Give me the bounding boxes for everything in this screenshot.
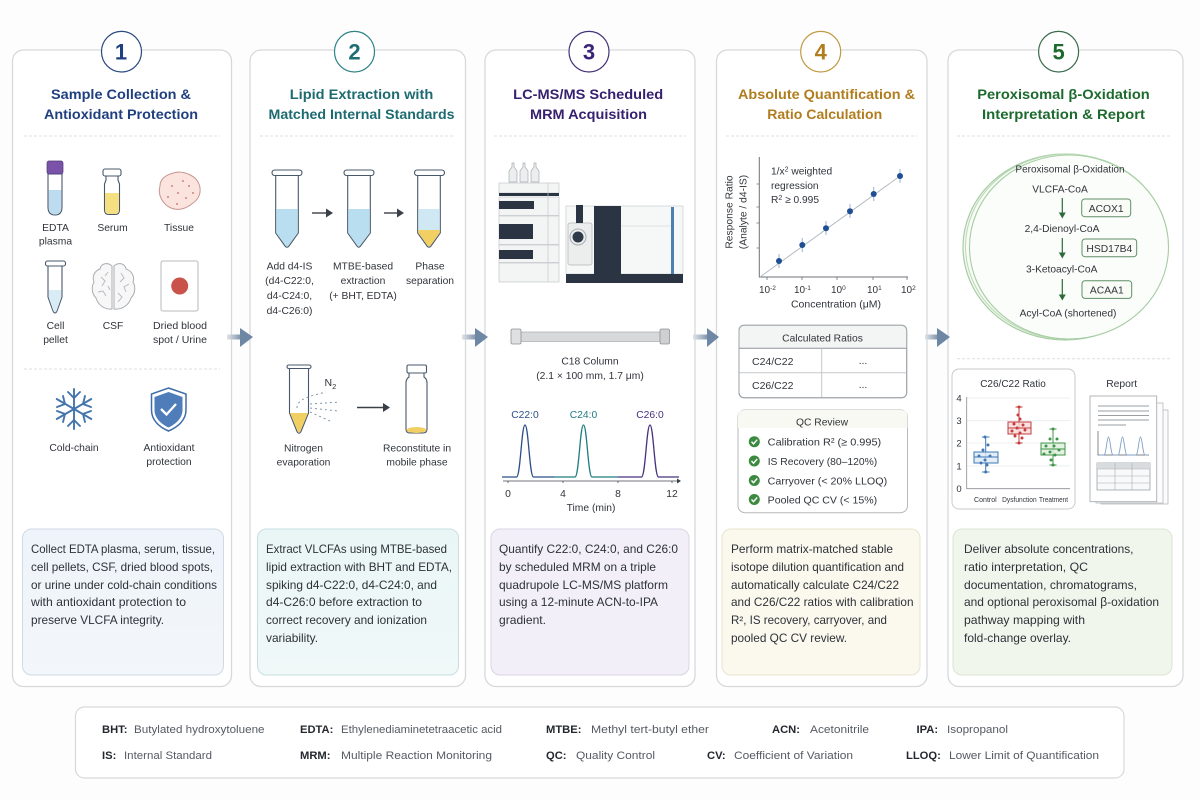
- chart: C26/C22 ratio box plot: [952, 369, 1075, 509]
- label: MTBE extraction: (+ BHT, EDTA): [329, 291, 397, 302]
- arrow: step 3 to 4: [693, 328, 719, 347]
- box: control: [974, 436, 998, 474]
- table: calculated ratios: ...: [859, 380, 867, 391]
- step number 3: [569, 31, 609, 72]
- text box: step 3 description: [491, 529, 689, 675]
- legend: abbreviations: MTBE:: [546, 724, 581, 736]
- label: EDTA plasma: plasma: [39, 236, 72, 248]
- label: report: Report: [1106, 379, 1137, 390]
- step number 5: [1039, 31, 1079, 72]
- table: calculated ratios: [739, 325, 907, 398]
- heading: LC-MS/MS: [513, 87, 663, 123]
- text box: step 5 description: ratio interpretation, QC: [964, 561, 1088, 574]
- table: calculated ratios: Calculated Ratios: [782, 334, 863, 344]
- label: add d4-IS: (d4-C22:0,: [265, 276, 314, 287]
- diagram: peroxisomal beta-oxidation pathway: 3-Ketoacyl-CoA: [1026, 265, 1098, 276]
- chart: calibration curve: Response Ratio: [724, 175, 736, 249]
- chart: chromatogram: 0: [505, 489, 511, 500]
- arrow: [357, 403, 390, 412]
- legend: abbreviations: [76, 707, 1124, 778]
- icon: dried blood spot card: [161, 261, 198, 311]
- icon: serum vial: [103, 169, 121, 214]
- chart: calibration curve: R: [771, 195, 778, 206]
- label: EDTA plasma: EDTA: [42, 223, 69, 234]
- enzyme: ACAA1: [1082, 281, 1132, 298]
- panel: QC review: [738, 410, 908, 513]
- chart: C26/C22 ratio box plot: 4: [956, 394, 962, 404]
- panel: step 3 LC-MS/MS: [485, 31, 695, 686]
- legend: abbreviations: Butylated hydroxytoluene: [134, 724, 264, 736]
- text box: step 1 description: cell pellets, CSF, dried blood spots,: [31, 561, 213, 574]
- heading: interpretation: Interpretation & Report: [982, 107, 1145, 123]
- diagram: peroxisomal beta-oxidation pathway: VLCFA-CoA: [1032, 184, 1088, 196]
- table: calculated ratios: C26/C22: [752, 380, 794, 392]
- heading: quantification: Ratio Calculation: [767, 107, 882, 123]
- heading: quantification: Absolute Quantification &: [738, 87, 915, 103]
- text box: step 3 description: quadrupole LC-MS/MS platform: [499, 579, 668, 592]
- icon: report document stack: [1090, 396, 1168, 504]
- chart: C26/C22 ratio box plot: Control: [974, 495, 997, 504]
- text box: step 2 description: correct recovery and ionization: [266, 614, 427, 627]
- chart: C26/C22 ratio box plot: Dysfunction: [1002, 495, 1037, 504]
- text box: step 5 description: documentation, chromatograms,: [964, 579, 1137, 592]
- chart: chromatogram: 4: [560, 489, 566, 500]
- step number 4: 4: [815, 40, 828, 64]
- label: N2: N: [324, 377, 332, 389]
- heading: interpretation: Peroxisomal β-Oxidation: [977, 87, 1150, 103]
- legend: abbreviations: IPA:: [916, 724, 938, 736]
- panel: step 2 lipid extraction: [250, 31, 466, 686]
- text box: step 2 description: variability.: [266, 632, 318, 645]
- heading: quantification: [738, 87, 915, 123]
- chart: chromatogram: C24:0: [570, 410, 598, 421]
- chart: chromatogram: [502, 410, 681, 514]
- heading: sample collection: Antioxidant Protection: [44, 107, 198, 123]
- label: MTBE extraction: MTBE-based: [333, 262, 393, 272]
- text box: step 3 description: using a 12-minute ACN-to-IPA: [499, 596, 658, 609]
- text box: step 3 description: by scheduled MRM on a triple: [499, 561, 656, 574]
- text box: step 5 description: fold-change overlay.: [964, 632, 1071, 645]
- chart: chromatogram: Time (min): [567, 503, 615, 514]
- legend: abbreviations: MRM:: [300, 750, 330, 762]
- chart: C26/C22 ratio box plot: C26/C22 Ratio: [980, 379, 1046, 390]
- chart: calibration curve: 10: [867, 285, 878, 296]
- box: dysfunction: [1008, 406, 1031, 444]
- text box: step 1 description: [22, 529, 224, 675]
- chart: chromatogram: 8: [615, 489, 621, 500]
- icon: C18 column: [511, 329, 670, 344]
- text box: step 1 description: with antioxidant protection to: [30, 596, 186, 609]
- label: nitrogen evaporation: [277, 444, 331, 468]
- chart: calibration curve: (Analyte / d4-IS): [738, 175, 750, 249]
- label: phase separation: [406, 262, 454, 287]
- label: C18 column: (2.1 × 100 mm, 1.7 μm): [536, 371, 644, 382]
- check: carryover: Carryover (< 20% LLOQ): [768, 476, 887, 488]
- text box: step 2 description: Extract VLCFAs using MTBE-based: [266, 543, 447, 556]
- chart: C26/C22 ratio box plot: 1: [956, 462, 962, 472]
- label: reconstitute in mobile phase: mobile phase: [386, 458, 448, 468]
- diagram: peroxisomal beta-oxidation pathway: Acyl-CoA (shortened): [1020, 309, 1116, 320]
- legend: abbreviations: Lower Limit of Quantification: [949, 750, 1099, 762]
- panel: step 1 sample collection: [12, 31, 232, 686]
- chart: C26/C22 ratio box plot: 2: [956, 438, 962, 450]
- step number 5: 5: [1052, 40, 1065, 64]
- heading: interpretation: [977, 87, 1150, 123]
- legend: abbreviations: LLOQ:: [906, 750, 941, 762]
- diagram: peroxisomal beta-oxidation pathway: Peroxisomal β-Oxidation: [1015, 164, 1125, 176]
- chart: C26/C22 ratio box plot: 0: [956, 484, 962, 495]
- enzyme: HSD17B4: HSD17B4: [1086, 244, 1132, 255]
- label: antioxidant protection: Antioxidant: [144, 443, 195, 454]
- chart: calibration curve: 1/x: [771, 166, 785, 178]
- label: dried blood spot / urine: spot / Urine: [153, 335, 207, 346]
- text box: step 1 description: or urine under cold-chain conditions: [31, 579, 217, 592]
- chart: calibration curve: 2: [778, 195, 782, 202]
- box: treatment: [1041, 428, 1065, 466]
- legend: abbreviations: Acetonitrile: [810, 724, 869, 736]
- label: antioxidant protection: protection: [146, 457, 192, 468]
- text box: step 1 description: Collect EDTA plasma, serum, tissue,: [31, 543, 215, 556]
- legend: abbreviations: CV:: [707, 750, 726, 762]
- legend: abbreviations: ACN:: [772, 724, 800, 736]
- text box: step 1 description: preserve VLCFA integrity.: [31, 614, 164, 627]
- icon: antioxidant shield: [152, 388, 186, 431]
- enzyme: ACOX1: [1082, 199, 1131, 217]
- chart: calibration curve: -1: [805, 285, 811, 292]
- label: add d4-IS: d4-C24:0,: [267, 291, 312, 302]
- arrow: [312, 208, 333, 218]
- label: cell pellet: [43, 321, 68, 346]
- label: add d4-IS: Add d4-IS: [267, 262, 313, 272]
- panel: step 4 quantification: [716, 31, 927, 686]
- icon: snowflake: [57, 389, 91, 429]
- icon: nitrogen evaporation: [287, 365, 340, 433]
- text box: step 5 description: pathway mapping with: [964, 614, 1085, 627]
- enzyme: ACOX1: ACOX1: [1089, 204, 1124, 215]
- legend: abbreviations: Coefficient of Variation: [734, 750, 853, 762]
- label: add d4-IS: d4-C26:0): [267, 306, 312, 317]
- chart: C26/C22 ratio box plot: 3: [956, 416, 962, 427]
- icon: LC stack with solvent bottles: [499, 163, 559, 282]
- label: phase separation: Phase: [415, 262, 445, 272]
- legend: abbreviations: Isopropanol: [947, 724, 1008, 736]
- chart: C26/C22 ratio box plot: Treatment: [1039, 495, 1069, 504]
- diagram: peroxisomal beta-oxidation pathway: [963, 154, 1168, 340]
- icon: EDTA plasma tube: [47, 161, 63, 215]
- chart: calibration curve: weighted: [788, 166, 832, 178]
- icon: tissue: [159, 172, 200, 209]
- chart: calibration curve: 1: [878, 285, 882, 292]
- label: dried blood spot / urine: [153, 321, 207, 346]
- label: reconstitute in mobile phase: [383, 444, 451, 468]
- diagram: peroxisomal beta-oxidation pathway: 2,4-Dienoyl-CoA: [1025, 224, 1100, 235]
- legend: abbreviations: Multiple Reaction Monitoring: [341, 750, 492, 762]
- label: EDTA plasma: [39, 223, 72, 248]
- chart: calibration curve: 10: [759, 285, 770, 296]
- table: calculated ratios: ...: [859, 356, 867, 367]
- label: serum: Serum: [97, 223, 128, 234]
- label: cell pellet: Cell: [47, 321, 64, 332]
- label: antioxidant protection: [144, 443, 195, 468]
- chart: calibration curve: 10: [794, 285, 805, 296]
- legend: abbreviations: EDTA:: [300, 724, 333, 736]
- chart: calibration curve: [724, 157, 916, 310]
- check: calibration: Calibration R² (≥ 0.995): [768, 436, 881, 448]
- icon: tube phase separation: [414, 170, 444, 247]
- arrow: [384, 208, 404, 218]
- icon: tube add d4-IS: [272, 170, 302, 247]
- chart: chromatogram: C26:0: [636, 410, 664, 421]
- arrow: step 1 to 2: [227, 328, 253, 347]
- heading: LC-MS/MS: LC-MS/MS Scheduled: [513, 87, 663, 103]
- text box: step 4 description: [722, 529, 920, 675]
- text box: step 2 description: d4-C26:0 before extraction to: [266, 596, 422, 609]
- text box: step 4 description: R², IS recovery, carryover, and: [731, 614, 887, 627]
- icon: cell pellet tube: [46, 261, 66, 313]
- text box: step 2 description: [258, 529, 458, 675]
- text box: step 4 description: and C26/C22 ratios with calibration: [731, 596, 914, 609]
- text box: step 2 description: spiking d4-C22:0, d4-C24:0, and: [266, 579, 437, 592]
- legend: abbreviations: IS:: [102, 750, 116, 762]
- text box: step 4 description: pooled QC CV review.: [731, 632, 847, 645]
- label: reconstitute in mobile phase: Reconstitute in: [383, 444, 451, 454]
- icon: mass spectrometer: [566, 205, 683, 283]
- text box: step 2 description: lipid extraction with BHT and EDTA,: [266, 561, 452, 574]
- text box: step 5 description: [953, 529, 1172, 675]
- label: add d4-IS: [265, 262, 314, 317]
- arrow: step 4 to 5: [925, 328, 950, 347]
- text box: step 5 description: Deliver absolute concentrations,: [964, 543, 1134, 556]
- chart: chromatogram: C22:0: [511, 410, 539, 421]
- chart: calibration curve: 2: [912, 285, 916, 292]
- table: calculated ratios: C24/C22: [752, 356, 794, 368]
- label: tissue: Tissue: [164, 223, 194, 234]
- arrow: step 2 to 3: [462, 328, 488, 347]
- step number 4: [801, 31, 841, 72]
- label: nitrogen evaporation: evaporation: [277, 458, 331, 468]
- label: dried blood spot / urine: Dried blood: [153, 321, 207, 332]
- text box: step 4 description: Perform matrix-matched stable: [731, 543, 893, 556]
- icon: reconstitute vial: [406, 365, 427, 433]
- enzyme: ACAA1: ACAA1: [1090, 286, 1124, 296]
- step number 2: 2: [348, 40, 361, 64]
- label: cold-chain: Cold-chain: [49, 443, 99, 454]
- icon: brain CSF: [92, 264, 135, 309]
- panel: step 5 interpretation: [948, 31, 1183, 686]
- heading: LC-MS/MS: MRM Acquisition: [530, 107, 647, 123]
- chart: calibration curve: 10: [901, 285, 912, 296]
- chart: calibration curve: 10: [831, 285, 842, 296]
- chart: calibration curve: 2: [785, 166, 789, 174]
- label: C18 column: [536, 356, 644, 382]
- heading: sample collection: [44, 87, 198, 123]
- chart: calibration curve: regression: [771, 181, 819, 192]
- label: phase separation: separation: [406, 276, 454, 287]
- chart: calibration curve: Concentration (μM): [791, 298, 881, 310]
- text box: step 5 description: and optional peroxisomal β-oxidation: [964, 596, 1159, 609]
- legend: abbreviations: Methyl tert-butyl ether: [591, 724, 709, 736]
- legend: abbreviations: Ethylenediaminetetraacetic acid: [341, 724, 502, 736]
- text box: step 3 description: Quantify C22:0, C24:0, and C26:0: [499, 543, 678, 556]
- text box: step 3 description: gradient.: [499, 614, 546, 627]
- step number 1: [102, 31, 142, 72]
- step number 2: [334, 31, 374, 72]
- legend: abbreviations: Quality Control: [576, 750, 655, 762]
- legend: abbreviations: QC:: [546, 750, 567, 762]
- legend: abbreviations: Internal Standard: [124, 750, 212, 762]
- heading: sample collection: Sample Collection &: [51, 87, 191, 103]
- text box: step 4 description: automatically calculate C24/C22: [731, 579, 899, 592]
- label: cell pellet: pellet: [43, 335, 68, 346]
- step number 3: 3: [583, 40, 595, 64]
- heading: lipid extraction: Lipid Extraction with: [290, 87, 433, 103]
- check: IS recovery: IS Recovery (80–120%): [768, 456, 877, 468]
- label: nitrogen evaporation: Nitrogen: [284, 444, 323, 454]
- text box: step 4 description: isotope dilution quantification and: [731, 561, 904, 574]
- label: MTBE extraction: extraction: [341, 276, 386, 287]
- chart: calibration curve: 0: [842, 285, 846, 292]
- enzyme: HSD17B4: [1082, 239, 1137, 257]
- chart: chromatogram: 12: [666, 489, 678, 500]
- heading: lipid extraction: Matched Internal Standards: [268, 107, 455, 123]
- chart: calibration curve: -2: [770, 285, 776, 292]
- check: pooled QC: Pooled QC CV (< 15%): [768, 494, 877, 506]
- heading: lipid extraction: [268, 87, 455, 123]
- label: C18 column: C18 Column: [561, 356, 619, 368]
- legend: abbreviations: BHT:: [102, 724, 127, 736]
- label: N2: 2: [332, 382, 336, 391]
- label: CSF: CSF: [103, 321, 123, 332]
- step number 1: 1: [115, 40, 127, 64]
- label: MTBE extraction: [329, 262, 397, 302]
- icon: tube MTBE extraction: [344, 170, 374, 247]
- panel: QC review: QC Review: [796, 418, 849, 428]
- chart: calibration curve: ≥ 0.995: [782, 195, 819, 206]
